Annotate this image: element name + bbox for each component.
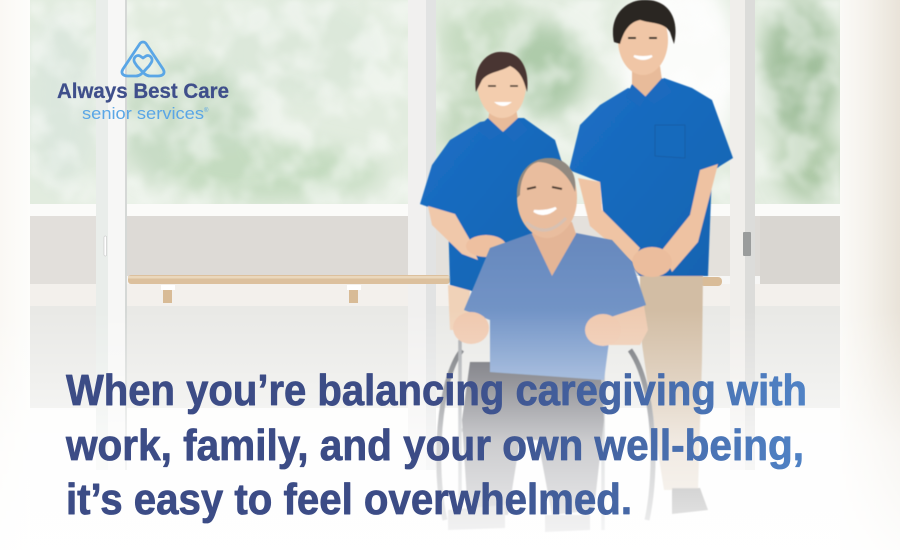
logo tagline: senior services bbox=[82, 104, 204, 123]
window frames bbox=[96, 0, 755, 470]
head bbox=[477, 55, 526, 118]
collar bbox=[477, 118, 503, 140]
headline: it’s easy to feel overwhelmed. bbox=[66, 475, 632, 524]
curtain left bbox=[0, 0, 30, 550]
person: older man in wheelchair bbox=[439, 158, 653, 532]
frosted lower panes bbox=[30, 306, 840, 410]
person: female caregiver bbox=[420, 52, 563, 330]
logo wordmark: Always Best Care bbox=[57, 80, 229, 103]
shirt bbox=[420, 118, 563, 296]
headline: work, family, and your own well-being, bbox=[65, 421, 804, 470]
head bbox=[618, 5, 668, 75]
bottom white fade bbox=[0, 310, 900, 550]
neck and arm bbox=[488, 108, 518, 132]
neck and arms bbox=[632, 66, 662, 98]
collar bbox=[626, 84, 646, 107]
head bbox=[517, 160, 577, 238]
headline: When you’re balancing caregiving with bbox=[66, 366, 807, 415]
shirt bbox=[569, 78, 733, 276]
foliage highlights bbox=[30, 0, 840, 206]
wooden handrail bbox=[128, 275, 722, 303]
curtain right bbox=[840, 0, 900, 550]
upper white ledge bbox=[30, 204, 840, 216]
logo: ® bbox=[204, 107, 209, 114]
arms and hands bbox=[608, 306, 648, 345]
wheelchair bbox=[439, 350, 653, 520]
trousers bbox=[640, 272, 703, 490]
icon: house and heart bbox=[122, 42, 164, 76]
mid ledge bbox=[30, 284, 840, 306]
neck bbox=[532, 222, 576, 276]
legs bbox=[462, 362, 604, 515]
person: male caregiver bbox=[569, 0, 733, 514]
shirt bbox=[464, 233, 646, 380]
logo bbox=[57, 42, 229, 123]
headline bbox=[65, 366, 807, 524]
